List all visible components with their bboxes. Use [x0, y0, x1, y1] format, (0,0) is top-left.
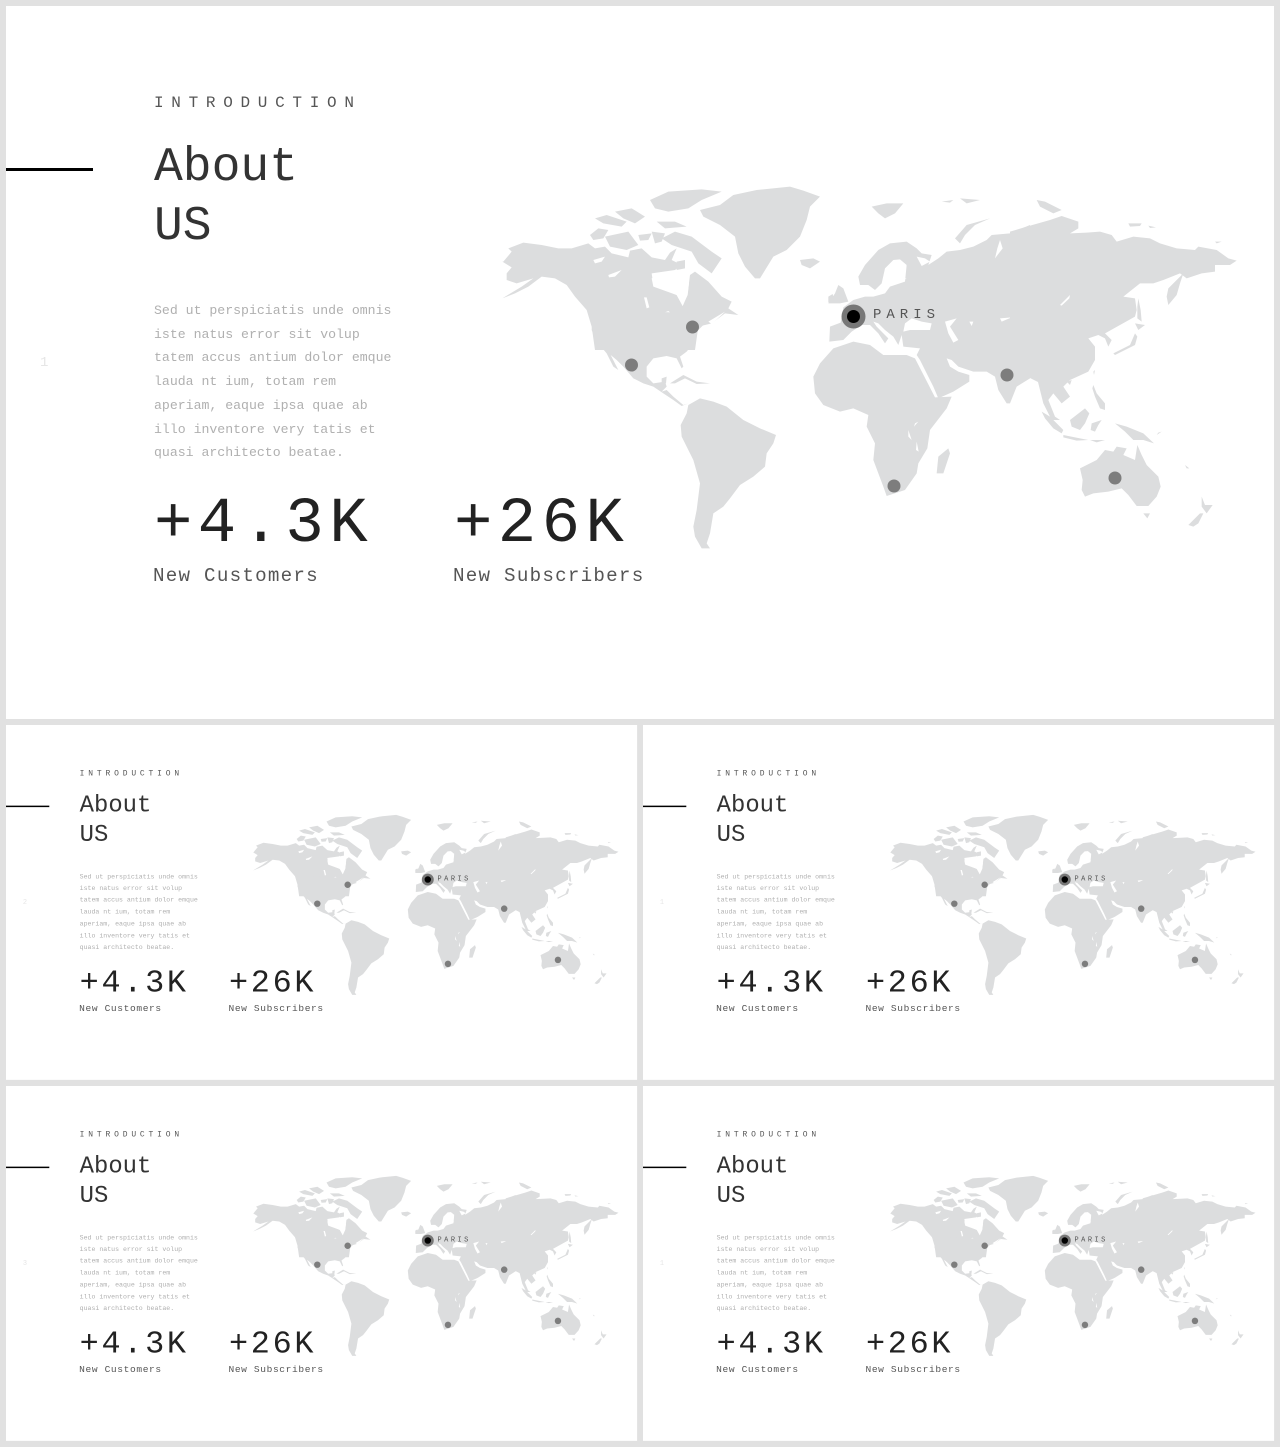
- body text: aperiam, eaque ipsa quae ab: [717, 1281, 823, 1288]
- paris marker: [842, 304, 866, 328]
- caption: new subscribers: New Subscribers: [228, 1364, 324, 1375]
- stat: new subscribers: +26K: [229, 1326, 316, 1362]
- body text: quasi architecto beatae.: [80, 1305, 174, 1312]
- paris marker: [422, 1235, 434, 1247]
- body text: Sed ut perspiciatis unde omnis: [80, 1234, 198, 1241]
- title: [80, 1153, 151, 1209]
- body text: tatem accus antium dolor emque: [80, 1257, 198, 1265]
- slide number: 2: [23, 899, 27, 907]
- title: About: [154, 141, 298, 195]
- accent rule: [643, 1167, 686, 1168]
- body text: Sed ut perspiciatis unde omnis: [80, 873, 198, 880]
- slide: large main: [6, 6, 1274, 719]
- caption: new subscribers: New Subscribers: [453, 565, 644, 587]
- title: [154, 141, 298, 254]
- location dots: [314, 882, 561, 967]
- body text: illo inventore very tatis et: [717, 1293, 827, 1300]
- paris label: PARIS: [438, 1236, 471, 1244]
- body text: quasi architecto beatae.: [717, 1305, 811, 1312]
- stat: new subscribers: +26K: [866, 965, 953, 1001]
- caption: new subscribers: New Subscribers: [865, 1003, 961, 1014]
- stat: new customers: +4.3K: [717, 965, 826, 1001]
- title: US: [717, 1183, 745, 1209]
- title: About: [717, 792, 788, 819]
- body text: iste natus error sit volup: [154, 327, 360, 342]
- body text: lauda nt ium, totam rem: [80, 1269, 170, 1277]
- world map: [253, 815, 618, 995]
- accent rule: [6, 806, 49, 807]
- world map: [890, 815, 1256, 995]
- stat: new customers: +4.3K: [154, 489, 373, 561]
- title: US: [80, 822, 108, 848]
- body text: [154, 303, 391, 460]
- title: US: [80, 1183, 108, 1209]
- title: [80, 792, 151, 848]
- paris marker: [1059, 1235, 1071, 1247]
- body text: aperiam, eaque ipsa quae ab: [717, 920, 823, 927]
- slide number: 1: [660, 1260, 664, 1268]
- location dots: [314, 1243, 561, 1328]
- caption: new subscribers: New Subscribers: [865, 1364, 961, 1375]
- body text: quasi architecto beatae.: [154, 445, 344, 460]
- slide number: 1: [40, 355, 48, 371]
- body text: tatem accus antium dolor emque: [717, 896, 835, 904]
- slide number: 3: [23, 1260, 27, 1268]
- body text: illo inventore very tatis et: [80, 932, 190, 939]
- paris label: PARIS: [1075, 875, 1108, 883]
- title: About: [717, 1153, 788, 1180]
- body text: Sed ut perspiciatis unde omnis: [717, 1234, 835, 1241]
- title: [716, 1153, 788, 1209]
- body text: aperiam, eaque ipsa quae ab: [80, 1281, 186, 1288]
- slide: small bottom right: [643, 1086, 1274, 1441]
- body text: Sed ut perspiciatis unde omnis: [154, 303, 391, 318]
- paris marker: [1059, 874, 1071, 886]
- body text: [717, 1234, 835, 1312]
- body text: aperiam, eaque ipsa quae ab: [80, 920, 186, 927]
- title: [716, 792, 788, 848]
- body text: iste natus error sit volup: [80, 885, 182, 892]
- caption: new customers: New Customers: [153, 565, 319, 587]
- stat: new customers: +4.3K: [80, 1326, 189, 1362]
- stat: new subscribers: +26K: [229, 965, 316, 1001]
- body text: tatem accus antium dolor emque: [80, 896, 198, 904]
- caption: new customers: New Customers: [716, 1003, 799, 1014]
- caption: new customers: New Customers: [79, 1364, 162, 1375]
- body text: lauda nt ium, totam rem: [154, 374, 336, 389]
- kicker: INTRODUCTION: [717, 1130, 820, 1139]
- slide: small top right: [643, 725, 1274, 1080]
- paris label: PARIS: [1075, 1236, 1108, 1244]
- body text: aperiam, eaque ipsa quae ab: [154, 398, 368, 413]
- title: US: [717, 822, 745, 848]
- body text: lauda nt ium, totam rem: [80, 908, 170, 916]
- caption: new customers: New Customers: [79, 1003, 162, 1014]
- slide number: 1: [660, 899, 664, 907]
- paris marker: [422, 874, 434, 886]
- body text: quasi architecto beatae.: [717, 944, 811, 951]
- stat: new customers: +4.3K: [80, 965, 189, 1001]
- body text: lauda nt ium, totam rem: [717, 908, 807, 916]
- accent rule: [6, 168, 93, 171]
- accent rule: [643, 806, 686, 807]
- accent rule: [6, 1167, 49, 1168]
- body text: lauda nt ium, totam rem: [717, 1269, 807, 1277]
- map land: [502, 187, 1237, 548]
- body text: iste natus error sit volup: [717, 1246, 819, 1253]
- kicker: INTRODUCTION: [717, 769, 820, 778]
- kicker: INTRODUCTION: [80, 769, 183, 778]
- body text: tatem accus antium dolor emque: [154, 350, 391, 365]
- body text: [80, 1234, 198, 1312]
- location dots: [951, 1243, 1198, 1328]
- body text: illo inventore very tatis et: [80, 1293, 190, 1300]
- stat: new subscribers: +26K: [866, 1326, 953, 1362]
- caption: new customers: New Customers: [716, 1364, 799, 1375]
- title: About: [80, 1153, 151, 1180]
- stat: new customers: +4.3K: [717, 1326, 826, 1362]
- body text: [717, 873, 835, 951]
- paris label: PARIS: [873, 307, 940, 323]
- body text: Sed ut perspiciatis unde omnis: [717, 873, 835, 880]
- body text: [80, 873, 198, 951]
- body text: illo inventore very tatis et: [154, 422, 376, 437]
- stat: new subscribers: +26K: [454, 489, 629, 561]
- body text: iste natus error sit volup: [717, 885, 819, 892]
- slide: small bottom left: [6, 1086, 637, 1441]
- world map: [890, 1176, 1256, 1356]
- location dots: [951, 882, 1198, 967]
- world map: [502, 186, 1236, 548]
- slide: small top left: [6, 725, 637, 1080]
- body text: iste natus error sit volup: [80, 1246, 182, 1253]
- kicker: INTRODUCTION: [80, 1130, 183, 1139]
- paris label: PARIS: [438, 875, 471, 883]
- body text: quasi architecto beatae.: [80, 944, 174, 951]
- location dots: [625, 320, 1122, 492]
- body text: tatem accus antium dolor emque: [717, 1257, 835, 1265]
- caption: new subscribers: New Subscribers: [228, 1003, 324, 1014]
- body text: illo inventore very tatis et: [717, 932, 827, 939]
- title: About: [80, 792, 151, 819]
- kicker: INTRODUCTION: [154, 94, 362, 112]
- title: US: [154, 200, 212, 254]
- world map: [253, 1176, 618, 1356]
